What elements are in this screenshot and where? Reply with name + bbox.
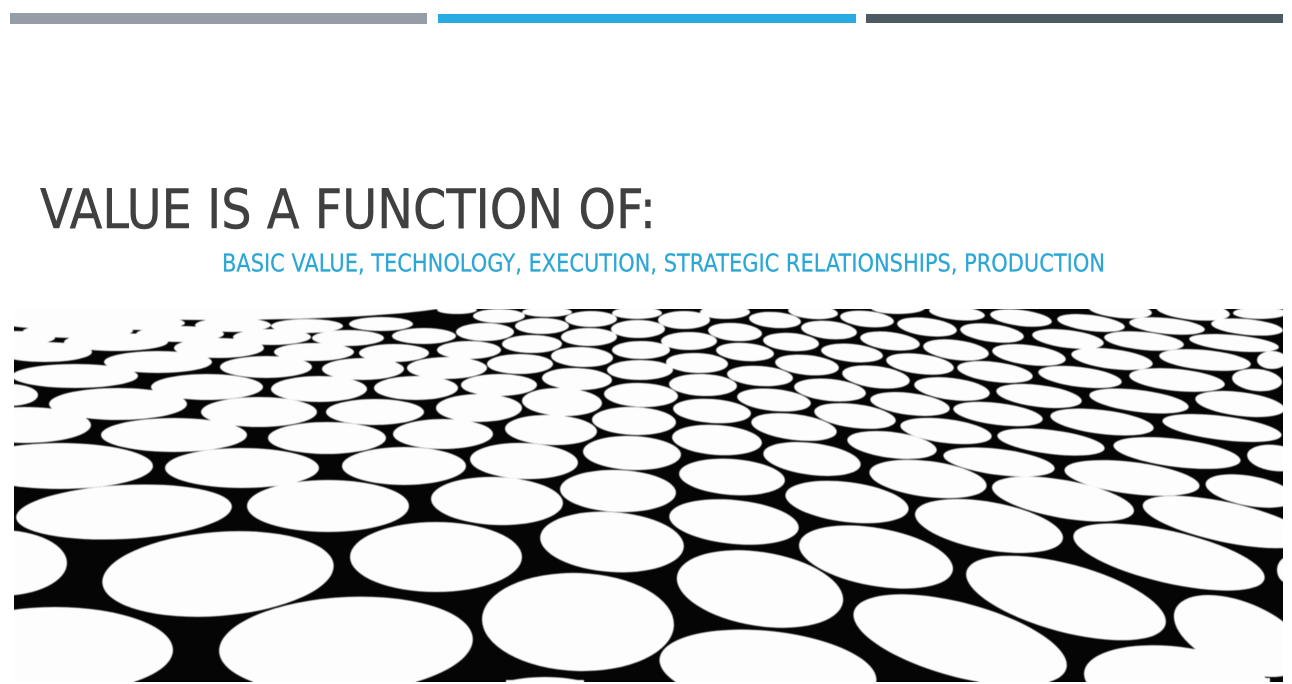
bar: dark slate accent	[866, 14, 1283, 23]
title: VALUE IS A FUNCTION OF:	[40, 178, 656, 241]
subtitle: BASIC VALUE, TECHNOLOGY, EXECUTION, STRATEGIC RELATIONSHIPS, PRODUCTION	[222, 248, 1105, 278]
bar: blue accent	[438, 14, 856, 23]
top white band	[14, 309, 440, 321]
bottom row plates cut by the photo edge	[0, 607, 173, 682]
bar: grey accent	[10, 13, 427, 24]
photo: field of white plates on black	[0, 280, 1292, 684]
